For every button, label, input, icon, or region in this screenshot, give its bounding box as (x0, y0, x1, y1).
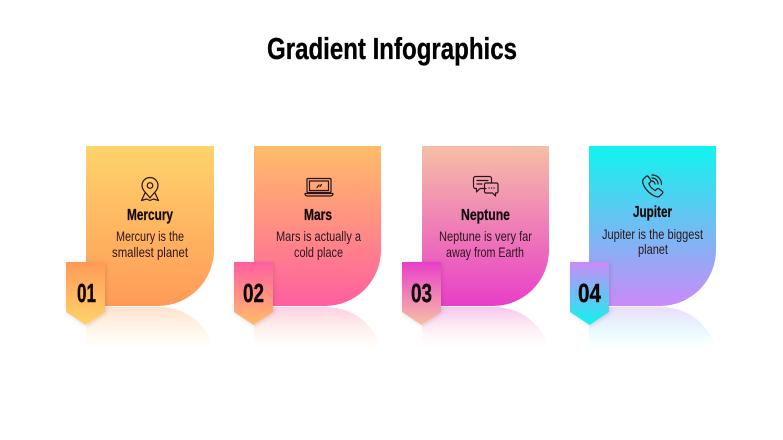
description: Mercury (112, 228, 188, 260)
reflection: Jupiter card (589, 307, 716, 348)
icon: chat bubbles (474, 176, 498, 196)
card: Mars (254, 146, 381, 306)
heading: Mercury: Mercury (127, 207, 173, 224)
description: Jupiter: Jupiter is the biggest (602, 226, 703, 242)
description: Mercury: Mercury is the (116, 228, 184, 244)
panel: Mercury (66, 146, 214, 348)
description: Mars (276, 228, 361, 260)
description: Mars: Mars is actually a (276, 228, 361, 244)
title: Gradient Infographics (267, 31, 517, 66)
badge: 03 (402, 262, 441, 325)
heading: Neptune: Neptune (461, 207, 510, 224)
card: Neptune (422, 146, 549, 306)
icon: laptop (305, 178, 333, 196)
reflection: Mercury card (86, 307, 214, 348)
heading: Jupiter: Jupiter (633, 204, 672, 221)
reflection: Mars card (254, 307, 381, 348)
card: Mercury (86, 146, 214, 306)
badge: 04 (570, 262, 609, 325)
description: Jupiter: planet (638, 241, 668, 257)
badge: 04: 04 (578, 278, 601, 308)
badge: 02 (234, 262, 273, 325)
panel: Mars (234, 146, 381, 348)
icon: map pin (142, 178, 158, 200)
badge: 01: 01 (77, 278, 96, 308)
description: Neptune (439, 228, 532, 260)
description: Neptune: Neptune is very far (439, 228, 532, 244)
panel: Neptune (402, 146, 549, 348)
panel: Jupiter (570, 146, 716, 348)
reflection: Neptune card (422, 307, 549, 348)
description: Neptune: away from Earth (446, 244, 524, 260)
heading: Mars: Mars (304, 207, 332, 224)
badge: 02: 02 (243, 278, 264, 308)
description: Mercury: smallest planet (112, 244, 188, 260)
badge: 03: 03 (411, 278, 432, 308)
description: Jupiter (602, 226, 703, 257)
card: Jupiter (589, 146, 716, 306)
badge: 01 (66, 262, 105, 325)
icon: phone (643, 175, 663, 197)
description: Mars: cold place (294, 244, 343, 260)
